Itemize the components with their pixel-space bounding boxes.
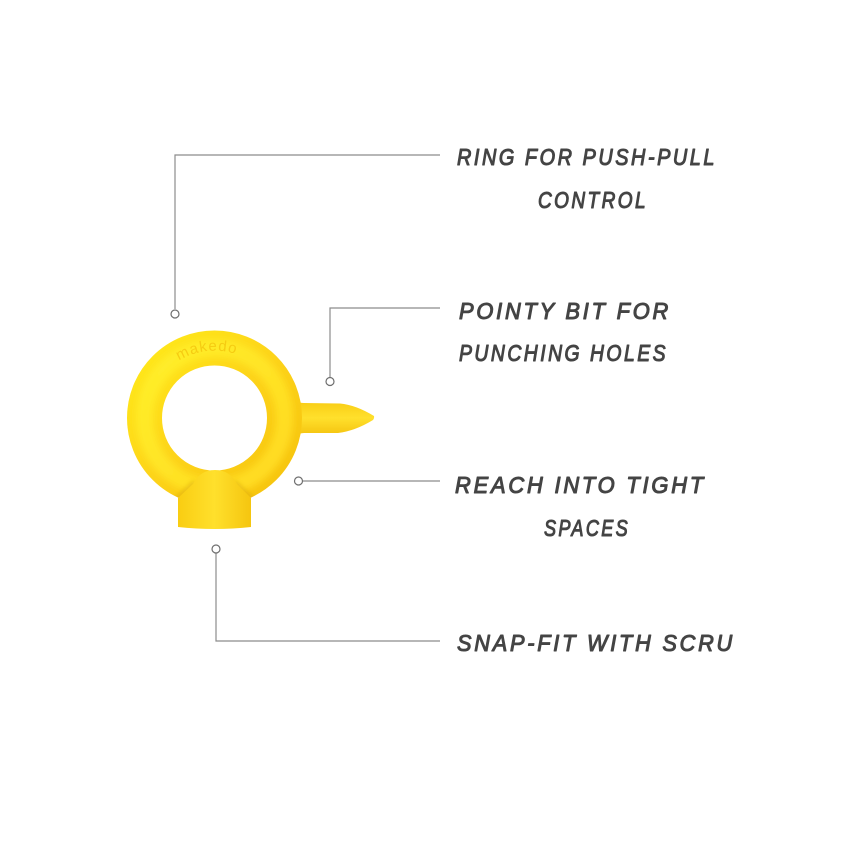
leader dot: [326, 378, 334, 386]
label text: SNAP-FIT WITH SCRU: [457, 630, 735, 656]
leader dot: [212, 545, 220, 553]
infographic canvas: [127, 148, 733, 652]
label text: [459, 298, 671, 366]
label text: [457, 144, 717, 213]
callout: ring: [171, 144, 717, 318]
product: yellow ring tool: [127, 330, 374, 529]
soft shadow beside the base: [175, 480, 254, 498]
callout: snap-fit: [212, 545, 735, 656]
label text: POINTY BIT FOR: [459, 298, 671, 324]
leader dot: [294, 477, 302, 485]
label text: REACH INTO TIGHT: [455, 472, 706, 498]
ring: [144, 348, 284, 488]
nut shaped base: [178, 470, 251, 529]
pointy spike: [296, 400, 374, 436]
label text: RING FOR PUSH-PULL: [457, 144, 717, 170]
label text: PUNCHING HOLES: [459, 340, 668, 366]
callout: tight spaces: [294, 472, 706, 541]
leader dot: [171, 310, 179, 318]
label text: SPACES: [544, 515, 630, 541]
label text: CONTROL: [538, 187, 648, 213]
leader line: [175, 155, 440, 309]
leader line: [216, 553, 440, 641]
label text: [455, 472, 706, 541]
leader line: [330, 308, 440, 377]
leader line: [303, 480, 440, 482]
embossed brand mark: makedo: [176, 340, 236, 360]
callout: pointy bit: [326, 298, 671, 386]
